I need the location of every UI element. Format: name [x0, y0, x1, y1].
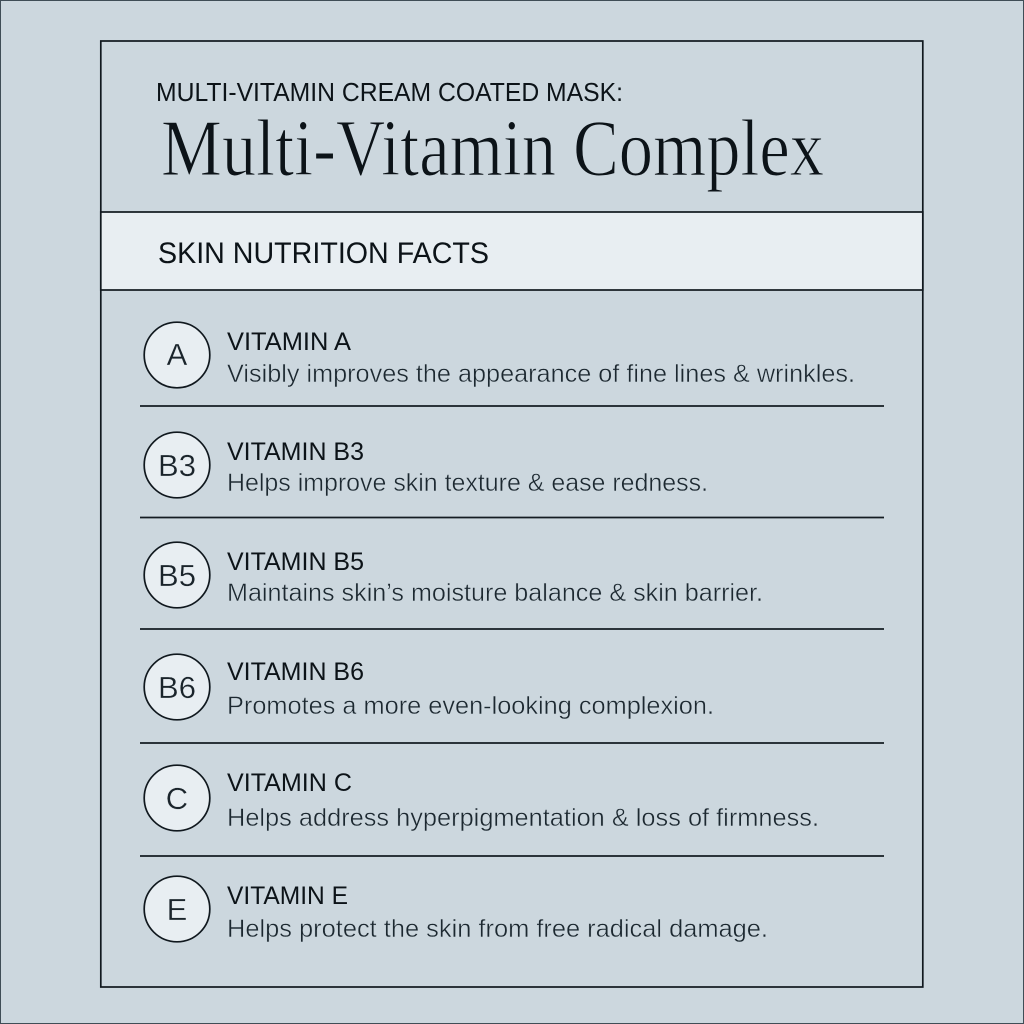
row: vitamin B3: B3	[158, 448, 196, 483]
title: Multi-Vitamin Complex	[161, 105, 824, 193]
row: vitamin E: VITAMIN E	[227, 882, 348, 910]
row: vitamin B3: Helps improve skin texture & ease redness.	[227, 469, 708, 497]
row: vitamin B6: B6	[158, 670, 196, 705]
row: vitamin C: VITAMIN C	[227, 769, 352, 797]
row: vitamin A: A	[167, 337, 188, 372]
row: vitamin A	[144, 322, 855, 388]
row: vitamin C: Helps address hyperpigmentation & loss of firmness.	[227, 804, 819, 832]
row: vitamin C	[144, 765, 819, 832]
row: vitamin B6: VITAMIN B6	[227, 658, 364, 686]
eyebrow heading: MULTI-VITAMIN CREAM COATED MASK:	[156, 77, 623, 107]
row: vitamin E: E	[167, 892, 187, 927]
row: vitamin C: C	[166, 781, 188, 816]
section band: skin nutrition facts: SKIN NUTRITION FACTS	[158, 237, 489, 270]
row: vitamin B5: Maintains skin’s moisture balance & skin barrier.	[227, 579, 763, 607]
row: vitamin B5: B5	[158, 558, 196, 593]
row: vitamin B3	[144, 432, 708, 498]
row: vitamin E	[144, 876, 768, 943]
row: vitamin B5: VITAMIN B5	[227, 548, 364, 576]
row: vitamin B5	[144, 542, 763, 608]
panel: main frame	[101, 41, 923, 987]
row: vitamin A: VITAMIN A	[227, 328, 351, 356]
section band: skin nutrition facts	[101, 212, 923, 290]
row: vitamin B6	[144, 654, 714, 720]
row: vitamin A: Visibly improves the appearance of fine lines & wrinkles.	[227, 360, 855, 388]
row: vitamin E: Helps protect the skin from free radical damage.	[227, 915, 768, 943]
row: vitamin B6: Promotes a more even-looking complexion.	[227, 692, 714, 720]
row: vitamin B3: VITAMIN B3	[227, 438, 364, 466]
